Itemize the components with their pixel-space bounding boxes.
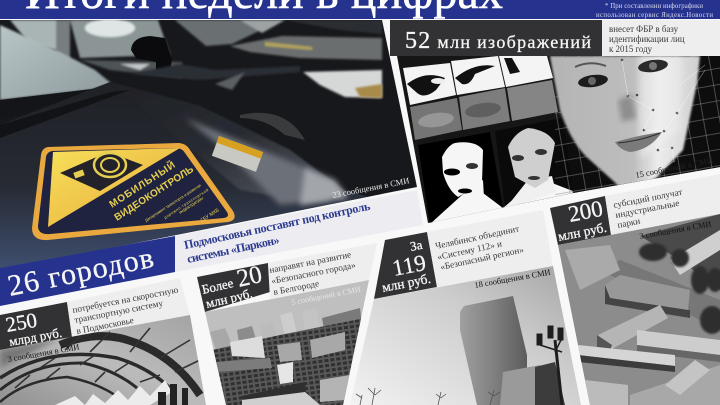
- description: субсидий получат: [612, 187, 683, 210]
- photo: industrial park: [555, 205, 720, 405]
- photo: rear car body highlights: [130, 64, 300, 80]
- description: Челябинск объединит: [434, 223, 520, 251]
- value box: млрд руб.: [8, 325, 63, 349]
- panel header: description: идентификации лиц: [609, 34, 685, 44]
- canopy zigzag steps: [55, 380, 172, 405]
- description: транспортную систему: [73, 298, 164, 325]
- photo: side mirror: [131, 36, 172, 70]
- description: индустриальные: [614, 198, 680, 220]
- building tower: [460, 296, 527, 405]
- caption: Parkon system: системы «Паркон»: [186, 233, 281, 266]
- city mass: [212, 318, 365, 405]
- source note: использован сервис Яндекс.Новости: [596, 12, 713, 19]
- description: парки: [616, 216, 641, 230]
- value box: Более: [200, 275, 235, 297]
- header band with title: [0, 0, 720, 19]
- description: [427, 210, 553, 287]
- description: [67, 278, 190, 337]
- description: [268, 243, 377, 299]
- photo: wheel: [240, 113, 305, 140]
- panel: more than 20 million rubles: [197, 243, 380, 405]
- icon: mobile video control sign: ГБУ МКБ: [200, 207, 221, 224]
- value box: За: [409, 237, 424, 254]
- face markers: [621, 59, 678, 162]
- value box: 200: [566, 196, 605, 227]
- panel: 250 billion rubles: [0, 278, 210, 405]
- canopy arches: [0, 336, 200, 402]
- white lower edge and shoulders: [434, 184, 576, 222]
- photo: station canopy: [0, 310, 210, 405]
- caption: 18 messages: 18 сообщения в СМИ: [474, 268, 551, 290]
- icon: mobile video control sign: дорожно-транспортной: [163, 187, 209, 220]
- caption: 23 messages: 23 сообщения в СМИ: [331, 175, 410, 200]
- photo: tower: [345, 260, 585, 405]
- panel: 119 million rubles: [345, 210, 585, 405]
- description: потребуется на скоростную: [71, 285, 179, 315]
- description: в Белгороде: [272, 278, 320, 297]
- icon: mobile video control sign: инфраструктуры: [178, 195, 204, 215]
- blue band: [0, 236, 175, 306]
- panel header: dark: [390, 20, 602, 56]
- description: «Безопасного города»: [270, 260, 357, 286]
- heading: 52 million images: 52 млн изображений: [405, 28, 591, 54]
- value box: [197, 261, 270, 312]
- panel header: description: [602, 20, 720, 56]
- photo: front car hood: [0, 82, 380, 270]
- source note: [596, 3, 713, 19]
- value box: млн руб.: [381, 271, 432, 295]
- lamp post: [537, 326, 563, 405]
- description: направят на развитие: [268, 249, 352, 275]
- panel: 52 million images: [390, 20, 720, 226]
- photo: front car windshield: [0, 25, 112, 100]
- photo: city skyline: [205, 280, 369, 405]
- panel: 26 cities: [0, 190, 423, 306]
- value box: [0, 302, 72, 350]
- value box: 20: [234, 261, 265, 293]
- description: в Подмосковье: [75, 315, 135, 336]
- high-rise buildings: [210, 308, 362, 349]
- value box: млн руб.: [557, 220, 608, 244]
- value box: млн руб.: [204, 286, 254, 311]
- caption: 15 messages: 15 сообщений в СМИ: [634, 155, 714, 180]
- icon: hood sticker: [212, 136, 263, 172]
- description: [605, 174, 720, 235]
- photo: large face: [550, 56, 720, 196]
- value box: [550, 196, 611, 245]
- foreground roof: [242, 382, 306, 400]
- caption: 3 messages: 3 сообщения в СМИ: [7, 342, 80, 364]
- light caption strip: [175, 190, 423, 272]
- photo panel: cars with mobile video control sign: [0, 19, 420, 270]
- caption: 5 messages: 5 сообщений в СМИ: [291, 285, 361, 307]
- sign text: МОБИЛЬНЫЙ: [107, 158, 177, 211]
- people: [158, 384, 188, 405]
- source note: * При составлении инфографики: [605, 3, 703, 10]
- photo: rear car headlight: [303, 70, 382, 98]
- description: «Систему 112» и: [436, 238, 503, 262]
- panel: 200 million rubles: [550, 174, 720, 405]
- icon: camera: [60, 152, 143, 191]
- value box: [374, 232, 437, 299]
- panel header: description: внесет ФБР в базу: [609, 24, 679, 34]
- photo: rear car windows: [10, 19, 382, 78]
- caption: Parkon system: Подмосковья поставят под контроль: [183, 199, 372, 252]
- photo: eye tiles: [403, 56, 558, 140]
- light buildings: [215, 332, 350, 402]
- industrial buildings: [565, 230, 720, 405]
- heading: 26 cities: 26 городов: [5, 241, 156, 303]
- bare trees: [356, 388, 500, 405]
- panel header: description: к 2015 году: [609, 44, 653, 54]
- canopy ribs: [15, 328, 200, 388]
- photo: face recognition collage: [395, 56, 720, 226]
- icon: mobile video control sign: Департамент транспорта и развития: [144, 183, 202, 223]
- value box: 119: [390, 250, 428, 281]
- trees: [639, 243, 720, 334]
- photo: high contrast portraits: [418, 118, 578, 225]
- description: «Безопасный регион»: [439, 244, 525, 272]
- icon: mobile video control sign: ВИДЕОКОНТРОЛЬ: [113, 164, 196, 224]
- caption: 3 messages: 3 сообщения в СМИ: [639, 219, 712, 241]
- value box: 250: [4, 308, 39, 337]
- icon: mobile video control sign: [32, 143, 235, 240]
